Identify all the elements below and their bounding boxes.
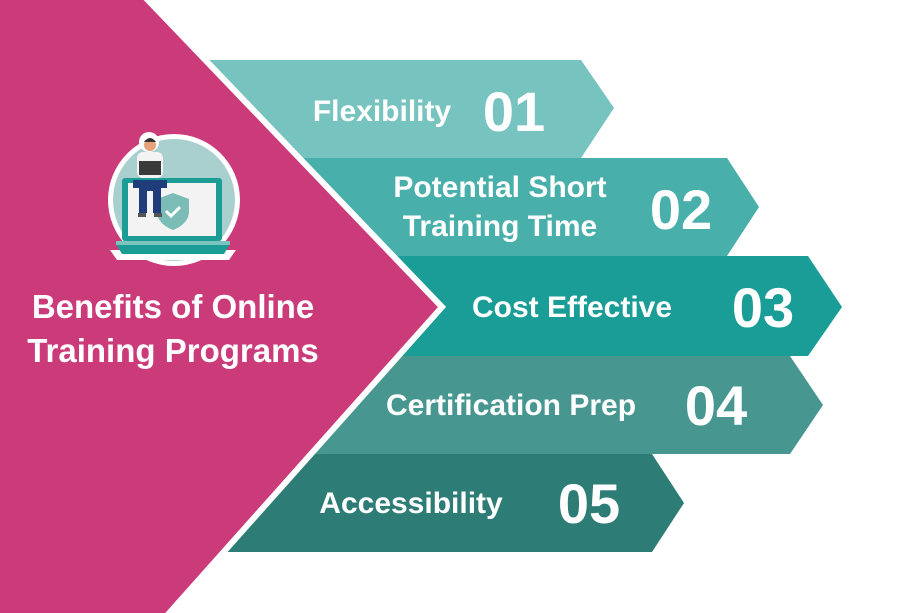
band 5: accessibility bbox=[150, 454, 684, 552]
band 4: certification prep: 04 bbox=[685, 374, 747, 437]
band 1: flexibility: 01 bbox=[483, 80, 545, 143]
title bbox=[27, 288, 319, 369]
band 4: certification prep bbox=[150, 356, 823, 454]
title: Training Programs bbox=[27, 332, 319, 369]
band 3: cost effective: Cost Effective bbox=[472, 291, 672, 324]
pink arrow panel bbox=[0, 0, 442, 613]
band 5: accessibility: Accessibility bbox=[319, 487, 503, 520]
band 1: flexibility bbox=[150, 60, 614, 158]
band 2: potential short training time: Training Time bbox=[403, 210, 597, 243]
band 4: certification prep: Certification Prep bbox=[386, 389, 636, 422]
band 3: cost effective: 03 bbox=[732, 276, 794, 339]
band 2: potential short training time: 02 bbox=[650, 178, 712, 241]
band 2: potential short training time: Potential Short bbox=[393, 171, 607, 204]
band 2: potential short training time bbox=[150, 158, 759, 256]
band 5: accessibility: 05 bbox=[558, 472, 620, 535]
icon: person with laptop bbox=[108, 132, 240, 266]
band 1: flexibility: Flexibility bbox=[313, 95, 451, 128]
band 3: cost effective bbox=[150, 256, 842, 356]
title: Benefits of Online bbox=[32, 288, 314, 325]
